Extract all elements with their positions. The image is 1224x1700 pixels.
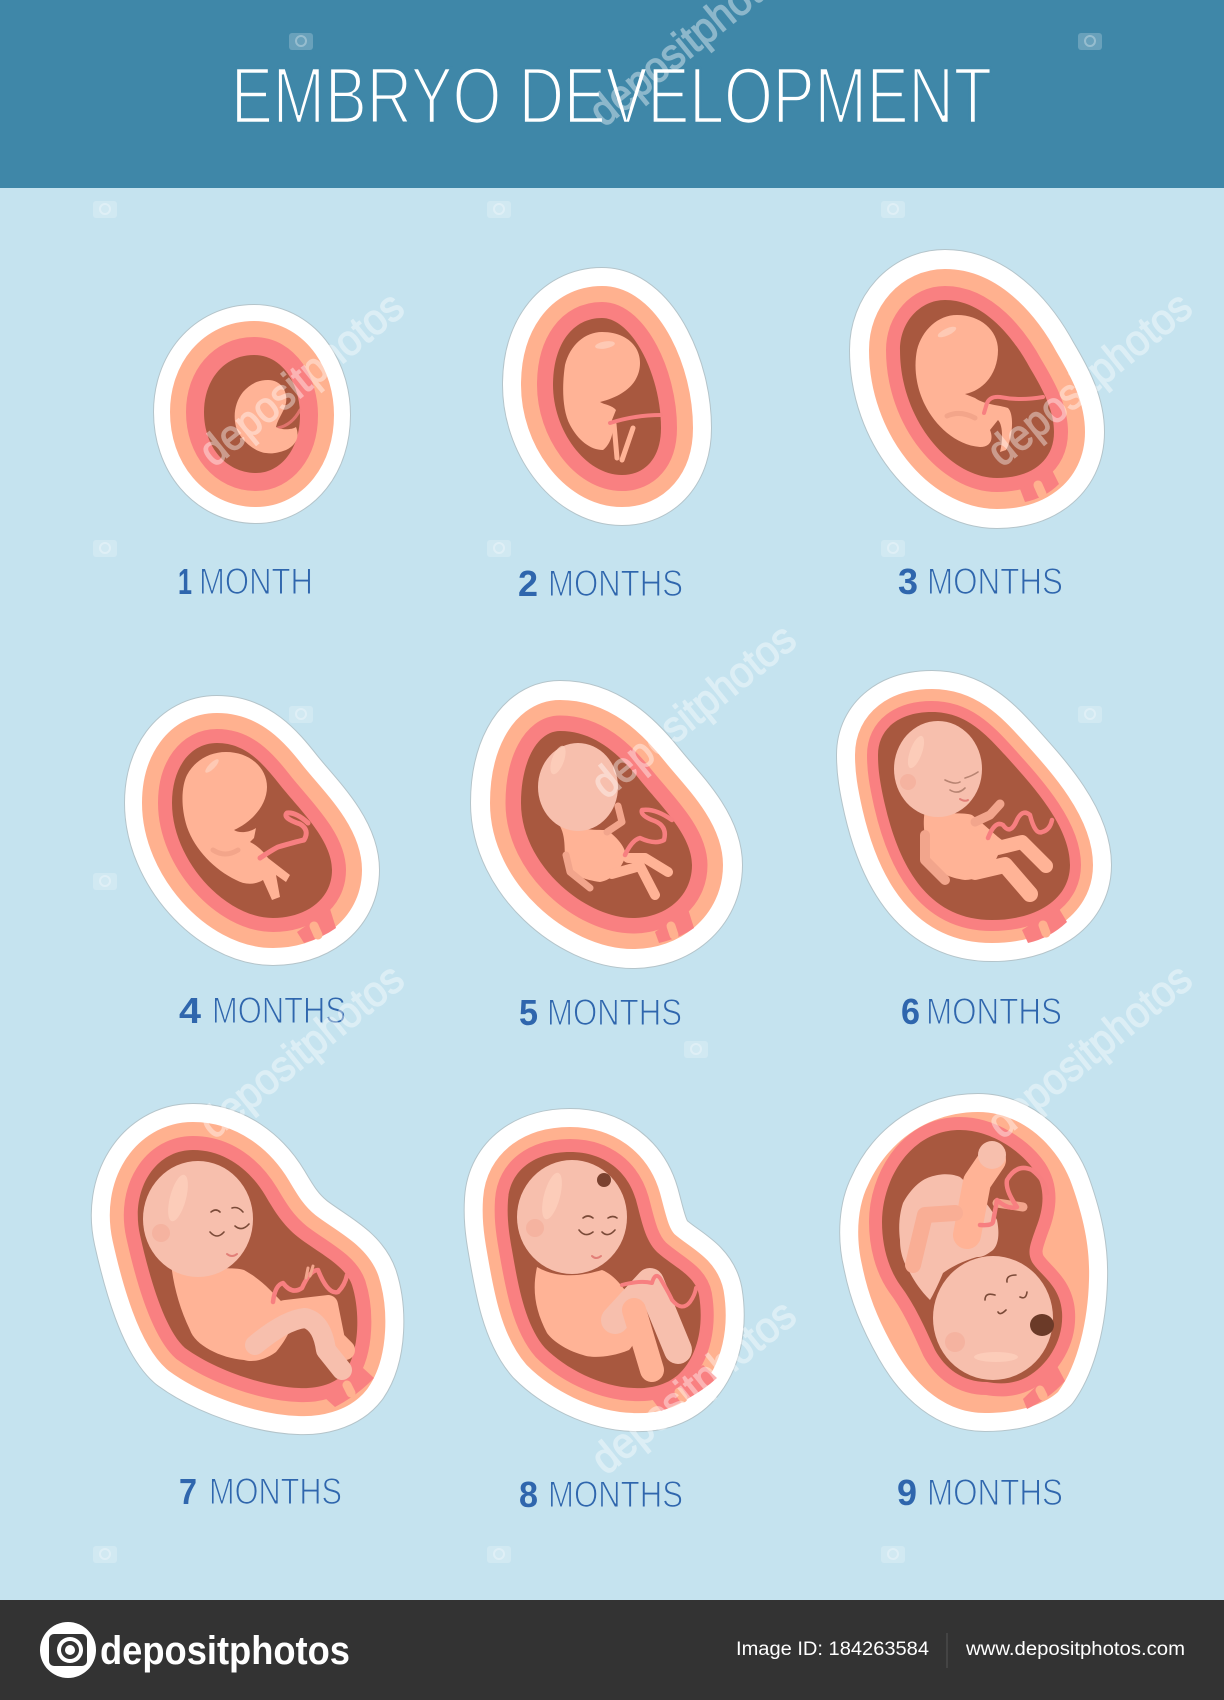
faint camera watermarks: [93, 33, 1102, 1563]
panel: 5 months: [521, 731, 694, 943]
footer image id: Image ID: 184263584: [736, 1639, 929, 1660]
label: 3 months: MONTHS: [927, 561, 1063, 602]
icon: depositphotos logo: [40, 1622, 96, 1678]
panel: 8 months: [508, 1152, 717, 1411]
label: 8 months: MONTHS: [548, 1474, 683, 1515]
label: 5 months: 5: [519, 992, 538, 1033]
panel: 7 months: [138, 1150, 374, 1407]
label: 8 months: 8: [519, 1474, 538, 1515]
depositphotos diagonal watermarks: depositphotos: [582, 1290, 805, 1484]
title: EMBRYO DEVELOPMENT: [231, 51, 992, 140]
label: 1 month: 1: [178, 561, 192, 602]
header band: [0, 0, 1224, 188]
label: 1 month: MONTH: [199, 561, 313, 602]
label: 7 months: MONTHS: [209, 1471, 342, 1512]
label: 2 months: MONTHS: [548, 563, 683, 604]
depositphotos diagonal watermarks: depositphotos: [582, 614, 805, 808]
label: 9 months: 9: [897, 1472, 917, 1513]
label: 6 months: MONTHS: [926, 991, 1062, 1032]
panel: 3 months: [900, 300, 1059, 502]
panel: 2 months: [553, 318, 661, 475]
footer brand name: depositphotos: [100, 1629, 350, 1673]
label: 2 months: 2: [518, 563, 538, 604]
label: 9 months: MONTHS: [927, 1472, 1063, 1513]
footer url: www.depositphotos.com: [965, 1639, 1185, 1660]
label: 4 months: 4: [179, 990, 201, 1031]
label: 4 months: MONTHS: [212, 990, 346, 1031]
depositphotos diagonal watermarks: depositphotos: [190, 282, 413, 476]
label: 5 months: MONTHS: [547, 992, 682, 1033]
label: 7 months: 7: [179, 1471, 197, 1512]
depositphotos diagonal watermarks: depositphotos: [978, 954, 1201, 1148]
label: 4 months: [179, 990, 346, 1031]
depositphotos diagonal watermarks: depositphotos: [190, 954, 413, 1148]
panel: 4 months: [172, 743, 336, 943]
footer band: [0, 1600, 1224, 1700]
depositphotos diagonal watermarks: depositphotos: [978, 282, 1201, 476]
label: 3 months: 3: [898, 561, 918, 602]
label: 6 months: 6: [901, 991, 920, 1032]
panel: 9 months: [858, 1112, 1089, 1413]
label: 7 months: [179, 1471, 342, 1512]
panel: 6 months: [878, 712, 1070, 943]
depositphotos diagonal watermarks: [190, 0, 1201, 1484]
panel: 1 month: [204, 355, 300, 473]
